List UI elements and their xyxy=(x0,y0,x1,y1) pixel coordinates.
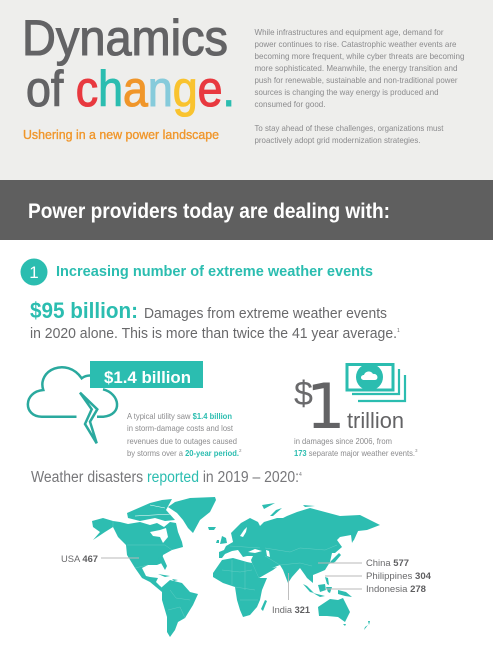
national borders xyxy=(113,521,337,618)
label: Philippines: Philippines 304 xyxy=(366,571,432,582)
Japan xyxy=(329,553,341,564)
statistic: $1 trillion xyxy=(294,370,404,443)
North America xyxy=(92,518,183,592)
label: Philippines xyxy=(325,571,432,582)
map heading: 4 xyxy=(299,472,302,478)
intro text: proactively adopt grid modernization strategies. xyxy=(254,135,420,145)
text: trillion detail: in damages since 2006, from xyxy=(294,436,392,446)
Black and Caspian seas xyxy=(248,549,270,557)
title: of change. xyxy=(26,61,235,117)
number badge xyxy=(20,258,48,286)
text: utility storm damage: by storms over a 20-year period. xyxy=(127,448,239,458)
text: trillion detail: 3 xyxy=(415,448,418,453)
icon: storm cloud xyxy=(28,367,117,443)
intro text xyxy=(254,27,465,145)
intro text: push for renewable, sustainable and non-traditional power xyxy=(254,75,458,85)
statistic: $1 trillion: trillion xyxy=(347,408,404,433)
intro text: more sophisticated. Meanwhile, the energy transition and xyxy=(254,63,458,73)
Greenland xyxy=(168,497,216,533)
key statistic xyxy=(30,298,400,342)
Arctic Eurasia islands xyxy=(262,503,315,516)
Iceland xyxy=(208,527,216,530)
text: utility storm damage: in storm-damage costs and lost xyxy=(127,423,234,433)
Hudson Bay xyxy=(150,528,168,543)
title xyxy=(22,10,235,117)
section heading: Increasing number of extreme weather events xyxy=(56,264,373,280)
text: utility storm damage: A typical utility saw $1.4 billion xyxy=(127,411,232,421)
text: trillion detail xyxy=(294,436,418,458)
Baltic Sea xyxy=(240,527,247,537)
label: USA: USA 467 xyxy=(61,554,98,565)
label: USA xyxy=(61,554,139,565)
Australia xyxy=(318,598,350,622)
banner: Power providers today are dealing with: xyxy=(28,200,390,223)
world map xyxy=(92,497,380,637)
callout: $1.4 billion xyxy=(90,361,203,388)
Eurasia xyxy=(219,508,380,583)
label: China xyxy=(318,558,409,569)
British Isles xyxy=(216,536,227,544)
panel: header xyxy=(0,0,493,180)
key statistic: Damages from extreme weather events xyxy=(144,305,387,322)
statistic: $1 trillion: $ xyxy=(294,375,313,413)
number badge: 1 xyxy=(29,263,39,282)
label: Indonesia xyxy=(325,584,427,595)
Southeast Asia islands xyxy=(303,577,352,597)
Africa xyxy=(213,558,267,617)
text: utility storm damage: 2 xyxy=(239,448,242,453)
Arctic islands xyxy=(127,499,175,521)
intro text: becoming more frequent, while cyber threats are becoming xyxy=(254,51,465,61)
intro text: consumed for good. xyxy=(254,99,326,109)
label: Indonesia: Indonesia 278 xyxy=(366,584,427,595)
Sakhalin xyxy=(352,531,358,542)
intro text: power continues to rise. Catastrophic weather events are xyxy=(254,39,457,49)
Cuba and Caribbean xyxy=(158,574,178,581)
New Zealand xyxy=(364,621,370,630)
text: utility storm damage xyxy=(127,411,242,458)
intro text: To stay ahead of these challenges, organizations must xyxy=(254,123,444,133)
South America xyxy=(162,580,198,637)
key statistic: $95 billion: xyxy=(30,298,138,323)
intro text: While infrastructures and equipment age, demand for xyxy=(254,27,444,37)
label: China: China 577 xyxy=(366,558,409,569)
label: India xyxy=(272,573,311,616)
map heading: Weather disasters reported in 2019 – 2020: xyxy=(31,469,299,486)
intro text: sources is changing the way energy is produced and xyxy=(254,87,439,97)
text: utility storm damage: revenues due to outages caused xyxy=(127,436,237,446)
icon: money stack xyxy=(347,364,405,401)
key statistic: in 2020 alone. This is more than twice the 41 year average. xyxy=(30,325,397,342)
title: Dynamics xyxy=(22,10,228,66)
Madagascar xyxy=(261,600,267,611)
banner xyxy=(0,180,493,240)
text: trillion detail: 173 separate major weather events. xyxy=(294,448,415,458)
subtitle: Ushering in a new power landscape xyxy=(23,127,219,142)
key statistic: 1 xyxy=(397,328,400,334)
label: India: India 321 xyxy=(272,605,311,616)
callout: $1.4 billion: $1.4 billion xyxy=(104,368,191,387)
statistic: $1 trillion: 1 xyxy=(306,370,345,443)
